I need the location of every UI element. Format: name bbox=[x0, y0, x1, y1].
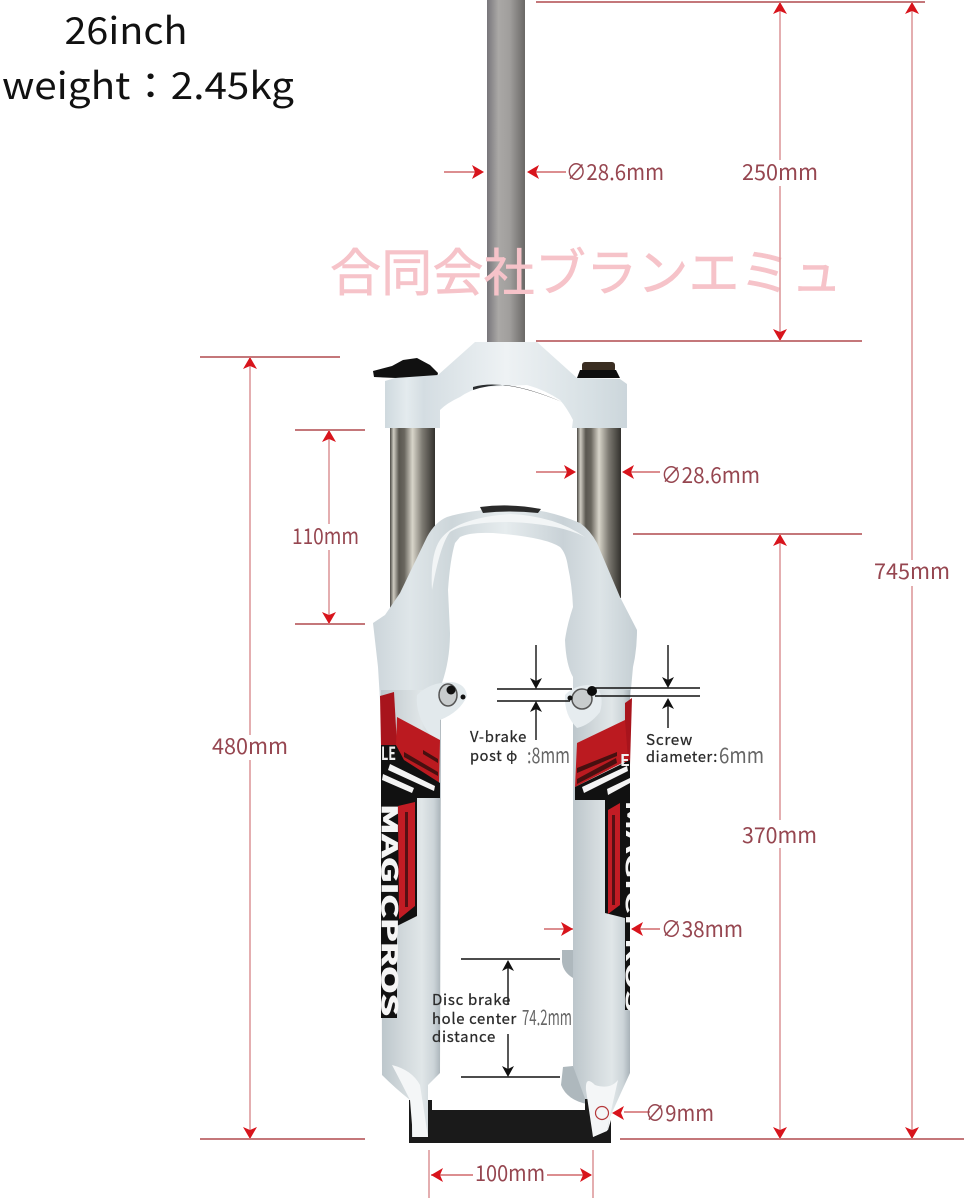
left v-brake boss bbox=[417, 682, 467, 742]
left decal: LE bbox=[381, 740, 396, 766]
label: v-brake post: :8mm bbox=[527, 740, 570, 770]
black arrowheads bbox=[502, 677, 674, 1077]
stanchion: right bbox=[577, 428, 621, 598]
right decal: MAGICPROS bbox=[620, 800, 649, 1012]
title: size and weight bbox=[2, 1, 294, 110]
red arrowheads bbox=[243, 2, 919, 1182]
red dimension labels: 250mm bbox=[742, 155, 818, 187]
right decal bbox=[575, 698, 632, 1010]
lower arch bbox=[373, 508, 637, 700]
left adjuster knob bbox=[373, 358, 438, 378]
title: size and weight: 26inch bbox=[64, 1, 188, 55]
red dimension labels: 100mm bbox=[475, 1156, 545, 1188]
label: screw diameter bbox=[646, 729, 764, 770]
label: disc brake distance: Disc brake bbox=[432, 989, 511, 1010]
arch badge bbox=[480, 505, 541, 513]
label: disc brake distance: 74.2mm bbox=[522, 1002, 572, 1032]
crown underside shadow bbox=[473, 385, 562, 402]
red dimension labels: 110mm bbox=[292, 519, 359, 551]
screw head bbox=[587, 686, 597, 696]
fork illustration bbox=[373, 0, 649, 1143]
red dimension lines bbox=[200, 2, 964, 1198]
red dimension labels bbox=[212, 155, 950, 1188]
red dimension labels: 370mm bbox=[742, 818, 817, 850]
red dimension labels: ∅9mm bbox=[645, 1096, 714, 1128]
label: v-brake post bbox=[470, 726, 570, 770]
label: disc brake distance: hole center bbox=[432, 1008, 517, 1029]
red dimension labels: 480mm bbox=[212, 729, 288, 761]
axle dropout bar bbox=[409, 1099, 611, 1143]
red dimension labels: ∅28.6mm bbox=[661, 458, 760, 490]
left lower leg bbox=[381, 690, 441, 1137]
label: disc brake distance: distance bbox=[432, 1026, 496, 1047]
disc brake tabs bbox=[561, 950, 587, 1104]
steerer tube bbox=[487, 0, 525, 345]
watermark: 合同会社ブランエミュ bbox=[330, 232, 842, 306]
label: screw diameter: diameter: bbox=[646, 746, 718, 767]
black dimension lines bbox=[461, 645, 700, 1077]
label: v-brake post: V-brake bbox=[470, 726, 527, 747]
red dimension labels: ∅38mm bbox=[661, 912, 743, 944]
red dimension labels: ∅28.6mm bbox=[566, 155, 664, 187]
right v-brake boss bbox=[565, 685, 602, 728]
right lower leg bbox=[573, 690, 630, 1137]
title: size and weight: weight：2.45kg bbox=[2, 56, 294, 110]
right decal: E bbox=[620, 747, 630, 771]
stanchion: left bbox=[390, 428, 435, 628]
red dimension labels: 745mm bbox=[874, 554, 950, 586]
right adjuster cap bbox=[577, 362, 620, 378]
arch highlight bbox=[432, 514, 585, 590]
label: v-brake post: post φ bbox=[470, 745, 518, 766]
dropout highlights bbox=[392, 1065, 618, 1137]
label: disc brake distance bbox=[432, 989, 572, 1047]
left decal: MAGICPROS bbox=[375, 804, 405, 1016]
fork crown bbox=[385, 342, 627, 428]
left decal bbox=[375, 692, 440, 1018]
label: screw diameter: Screw bbox=[646, 729, 693, 750]
label: screw diameter: 6mm bbox=[719, 740, 764, 770]
